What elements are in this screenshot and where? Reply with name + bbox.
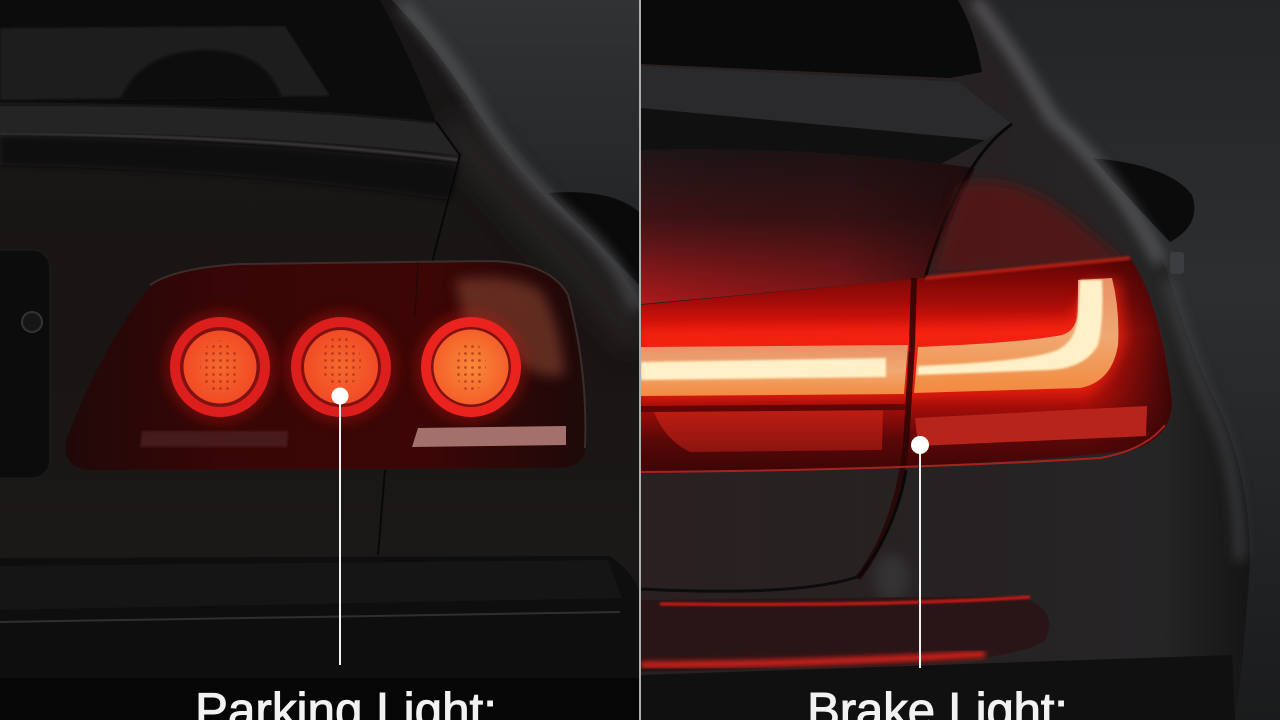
dark band [641,404,905,412]
trunk lid [641,66,1012,140]
spoiler [1092,158,1194,242]
lamp light bar right [914,278,1118,393]
trunk seam [858,278,914,578]
lens reflection [455,278,565,376]
mirror tab [1170,252,1184,274]
reverse strip right [412,426,566,447]
panel: parking light car [0,0,639,720]
lamp 3 [415,311,527,423]
callout: brake light pointer [911,436,929,668]
reverse strip left [140,431,288,447]
plate lock [22,312,42,332]
car body [0,0,639,406]
rear window [0,0,436,122]
red reflecting panel [641,149,975,304]
divider [639,0,641,720]
rear window [641,0,982,78]
body sheen [874,556,910,598]
callout: parking light pointer [332,388,348,665]
panel: brake light car [641,0,1280,720]
tail lamp housing [641,258,1172,472]
bumper [0,556,639,614]
pillar sheen [402,4,636,310]
tail lamp housing [66,261,585,470]
lamp glow [641,280,1125,398]
lamp 1 [164,311,276,423]
lower edge highlight [641,425,1165,472]
lamp 2 [285,311,397,423]
trunk lid [0,106,458,155]
lower lens left [654,410,883,452]
lower lens right [915,406,1147,446]
bumper [641,596,1049,672]
lower body seam [641,576,860,591]
car body [641,138,1250,675]
lamp light bar left [641,345,908,396]
pillar highlight [975,0,1160,262]
plate recess [0,250,50,478]
right body edge highlight [1168,280,1240,560]
spoiler silhouette [548,192,639,285]
